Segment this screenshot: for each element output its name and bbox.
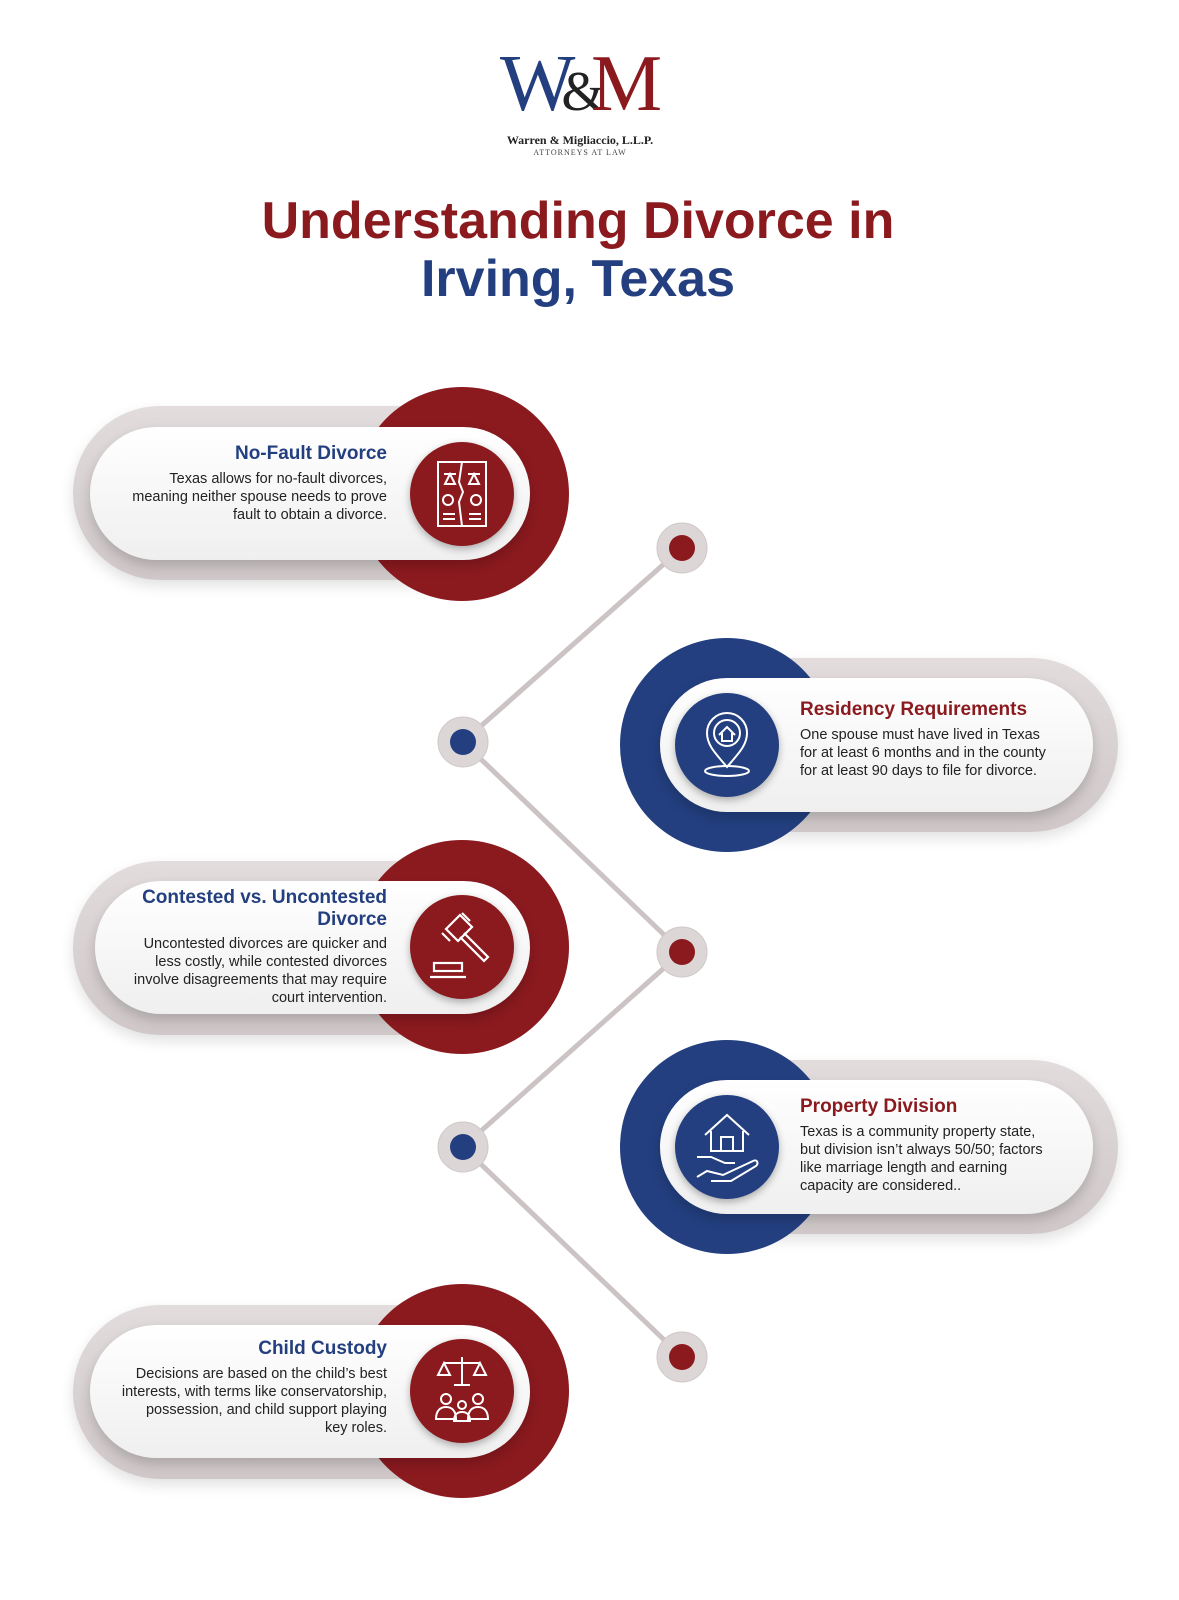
- text: contested: Contested vs. Uncontested Divorce: [142, 887, 387, 930]
- panel: property division: [620, 1040, 1122, 1254]
- title: [262, 192, 894, 308]
- icon: divorce document: [410, 442, 514, 546]
- text: contested: Uncontested divorces are quicker and less costly, while contested divorces involve disagreements that may require court intervention.: [134, 936, 387, 1006]
- text: child custody: [122, 1338, 387, 1436]
- title: Understanding Divorce in: [262, 192, 894, 250]
- text: property: Texas is a community property state, but division isn’t always 50/50; factors like marriage length and earning capacity are considered..: [800, 1124, 1043, 1194]
- text: no-fault: Texas allows for no-fault divorces, meaning neither spouse needs to prove fault to obtain a divorce.: [132, 471, 387, 523]
- panel: no-fault divorce: [70, 387, 569, 601]
- panel: contested vs uncontested: [70, 840, 569, 1054]
- title: Irving, Texas: [421, 250, 735, 308]
- logo: ATTORNEYS AT LAW: [533, 148, 627, 157]
- text: no-fault: [132, 443, 387, 523]
- icon: scales and family: [410, 1339, 514, 1443]
- panel: child custody: [70, 1284, 569, 1498]
- text: residency: [800, 699, 1046, 779]
- text: residency: Residency Requirements: [800, 699, 1027, 720]
- icon: house in hand: [675, 1095, 779, 1199]
- text: child custody: Decisions are based on the child’s best interests, with terms like conservatorship, possession, and child support playing: [122, 1366, 387, 1418]
- text: contested: [134, 887, 387, 1006]
- icon: location house: [675, 693, 779, 797]
- text: child custody: key roles.: [325, 1420, 387, 1436]
- text: residency: One spouse must have lived in Texas for at least 6 months and in the county for at least 90 days to file for divorce.: [800, 727, 1046, 779]
- text: child custody: Child Custody: [258, 1338, 387, 1359]
- logo: [500, 40, 660, 157]
- logo: Warren & Migliaccio, L.L.P.: [507, 133, 653, 147]
- panel: residency requirements: [620, 638, 1122, 852]
- icon: gavel: [410, 895, 514, 999]
- text: property: Property Division: [800, 1096, 957, 1117]
- text: no-fault: No-Fault Divorce: [235, 443, 387, 464]
- logo: W&M: [500, 40, 648, 128]
